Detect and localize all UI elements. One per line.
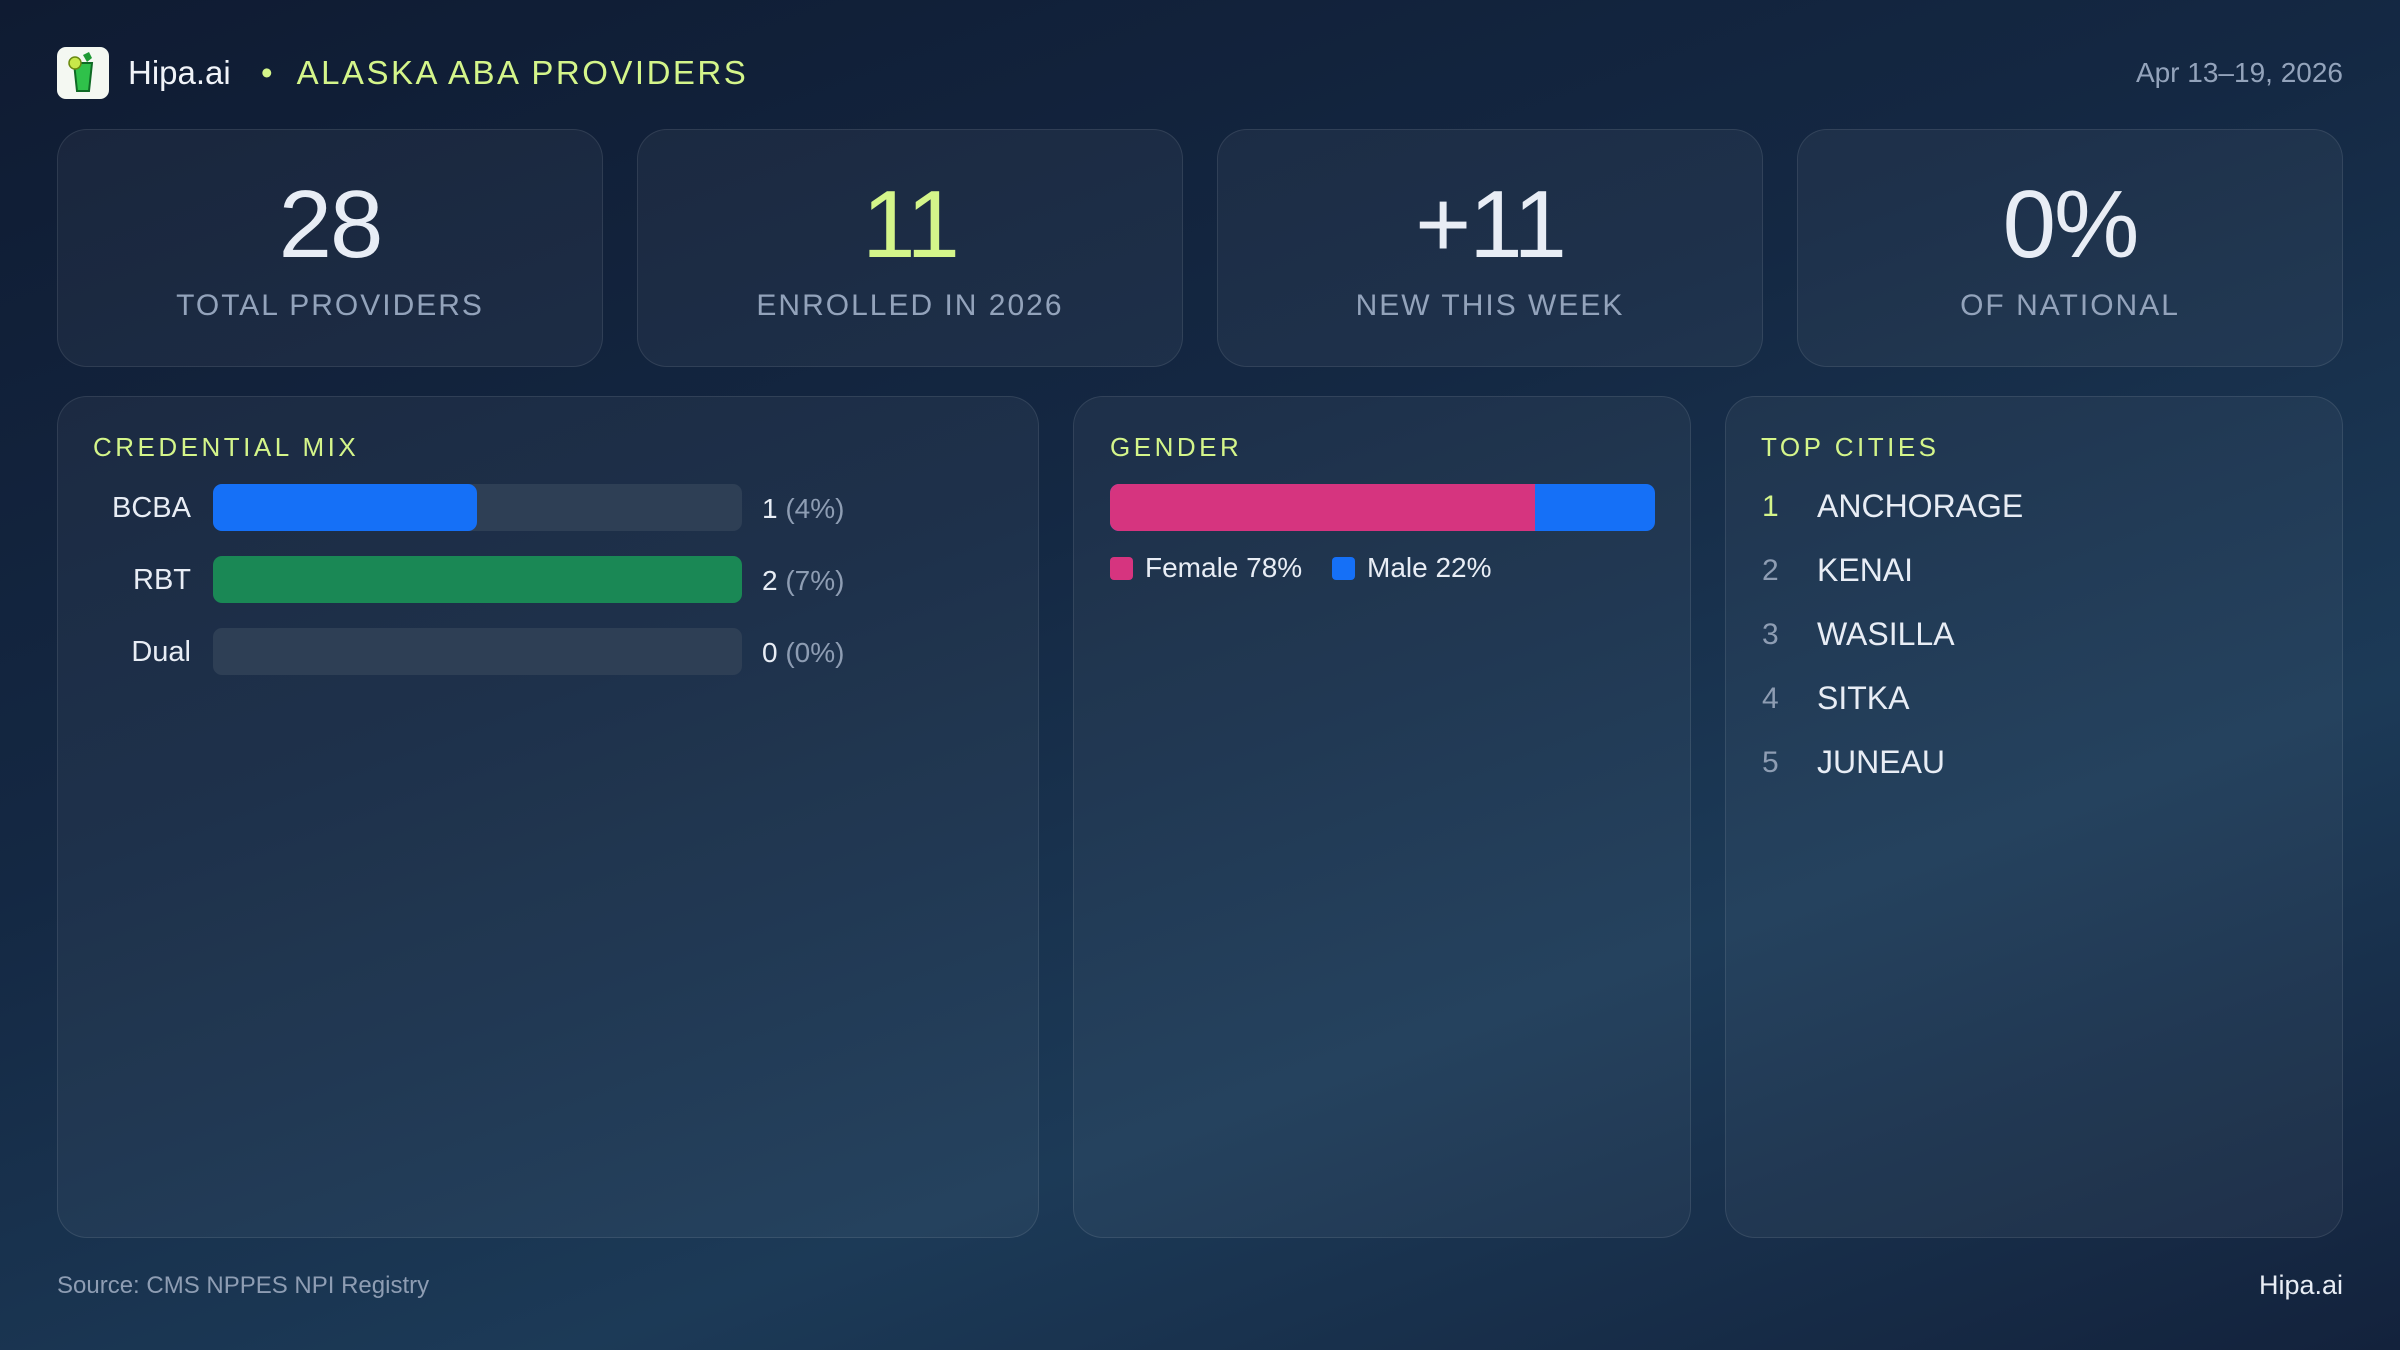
panel: gender: [1073, 396, 1691, 1238]
header: [57, 47, 748, 99]
brand name: Hipa.ai: [128, 54, 231, 91]
heading: top cities: TOP CITIES: [1761, 432, 1940, 462]
icon: logo: [57, 47, 109, 99]
city list: 4: [1762, 682, 1779, 715]
kpi: new this week: [1217, 129, 1763, 367]
city list: 5: [1762, 746, 1779, 779]
kpi: enrolled: [637, 129, 1183, 367]
heading: credential mix: CREDENTIAL MIX: [93, 432, 359, 462]
heading: gender: GENDER: [1110, 432, 1242, 462]
city list: WASILLA: [1817, 616, 1955, 652]
kpi: total providers: [57, 129, 603, 367]
bar chart: credentials: RBT: [133, 564, 191, 596]
bar chart: credentials: BCBA: [112, 492, 191, 524]
city list: ANCHORAGE: [1817, 488, 2023, 524]
kpi: new this week: +11: [1415, 171, 1565, 278]
legend: [1110, 552, 1492, 583]
kpi: new this week: NEW THIS WEEK: [1356, 289, 1624, 322]
panel: credential mix: [57, 396, 1039, 1238]
city list: 1: [1762, 490, 1779, 523]
city list: [1762, 488, 2023, 780]
footer: source: Source: CMS NPPES NPI Registry: [57, 1272, 429, 1299]
bar chart: credentials: 2 (7%): [762, 565, 844, 596]
bar chart: credentials: Dual: [131, 636, 191, 668]
kpi: enrolled: ENROLLED IN 2026: [756, 289, 1064, 322]
bar chart: credentials: [112, 484, 844, 675]
kpi: of national: [1797, 129, 2343, 367]
kpi: of national: OF NATIONAL: [1960, 289, 2180, 322]
legend: Male 22%: [1367, 552, 1492, 583]
date: Apr 13–19, 2026: [2136, 57, 2343, 88]
city list: SITKA: [1817, 680, 1909, 716]
kpi: enrolled: 11: [862, 171, 958, 278]
legend: Female 78%: [1145, 552, 1302, 583]
city list: KENAI: [1817, 552, 1913, 588]
gender bar: [1110, 484, 1655, 531]
city list: 3: [1762, 618, 1779, 651]
city list: 2: [1762, 554, 1779, 587]
kpi: of national: 0%: [2003, 171, 2137, 278]
kpi: total providers: TOTAL PROVIDERS: [176, 289, 484, 322]
title: • ALASKA ABA PROVIDERS: [261, 54, 748, 91]
bar chart: credentials: 0 (0%): [762, 637, 844, 668]
bar chart: credentials: 1 (4%): [762, 493, 844, 524]
panel: top cities: [1725, 396, 2343, 1238]
kpi: total providers: 28: [279, 171, 381, 278]
city list: JUNEAU: [1817, 744, 1945, 780]
footer: brand: Hipa.ai: [2259, 1270, 2343, 1300]
